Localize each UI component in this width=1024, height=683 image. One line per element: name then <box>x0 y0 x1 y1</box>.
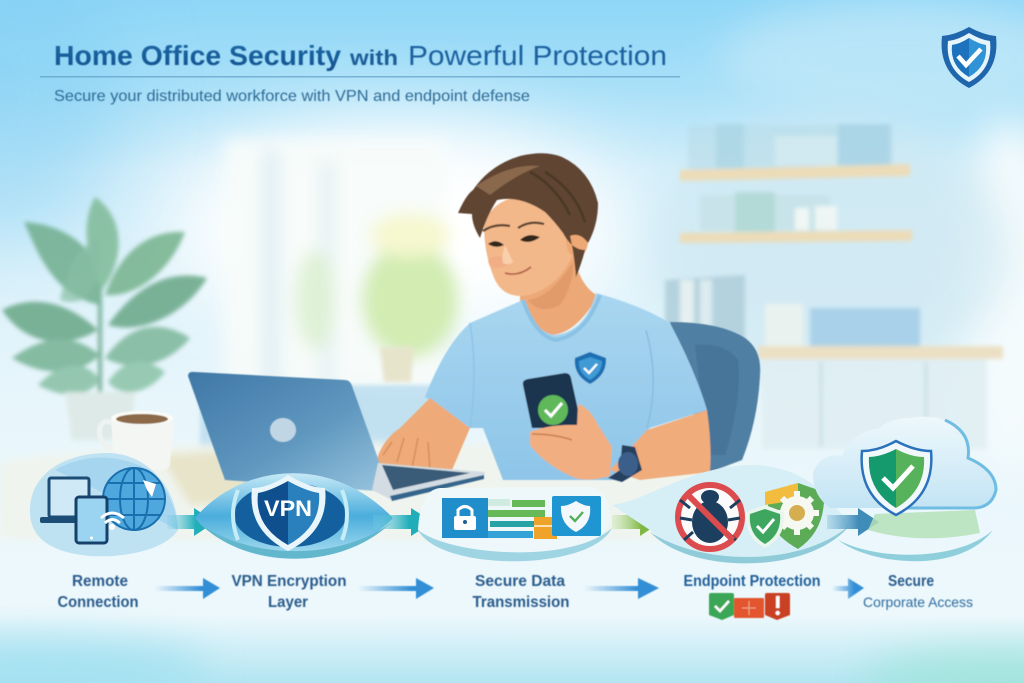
title: Home Office Security <box>54 40 341 71</box>
t-shirt <box>425 293 707 480</box>
label: VPN Encryption Layer: VPN Encryption <box>232 573 346 590</box>
laptop <box>188 372 485 501</box>
person working at the laptop <box>376 153 760 482</box>
arrow: VPN to data <box>373 508 433 536</box>
head <box>484 195 578 296</box>
icon: shield check tile <box>552 496 601 536</box>
left arm and typing hand <box>376 398 470 474</box>
step labels row <box>58 573 973 620</box>
icon: laptop <box>40 478 89 523</box>
arrow: label 4 to 5 <box>832 578 864 599</box>
right arm <box>610 410 711 480</box>
potted plant on the left <box>2 197 207 440</box>
icon: small green shield <box>746 505 784 548</box>
eyes and brows <box>488 241 504 247</box>
icon: cloud <box>813 417 996 508</box>
ear <box>566 225 588 257</box>
arrow: label 2 to 3 <box>358 578 434 599</box>
subtitle: Secure your distributed workforce with VPN and endpoint defense <box>54 88 530 105</box>
process flow panels <box>30 417 996 563</box>
title: with <box>349 47 398 70</box>
label: Secure Data Transmission: Secure Data <box>475 573 565 590</box>
label: Secure Corporate Access: Secure <box>888 573 934 590</box>
phone <box>523 373 582 428</box>
neck <box>520 250 598 335</box>
label: Endpoint Protection: Endpoint Protection <box>684 573 820 590</box>
desk surface <box>0 442 760 540</box>
icon: prohibited bug <box>678 485 742 549</box>
label: Secure Corporate Access: Corporate Access <box>863 594 973 610</box>
arrow: label 3 to 4 <box>584 578 659 599</box>
panel: secure corporate access cloud <box>813 417 996 561</box>
hair <box>458 153 598 277</box>
arrow: data to endpoint <box>612 508 661 536</box>
label: Secure Corporate Access <box>863 573 973 610</box>
shirt shield badge <box>575 352 606 384</box>
title: Powerful Protection <box>408 40 667 71</box>
window with blurred greenery <box>200 140 458 475</box>
icon: top-right security shield <box>942 27 996 88</box>
label: Remote Connection: Connection <box>58 594 138 611</box>
data stream bars <box>488 499 545 538</box>
label: VPN Encryption Layer: Layer <box>268 594 308 611</box>
icon: large green shield <box>862 441 931 515</box>
orange data stack <box>534 517 557 539</box>
status badges <box>709 593 790 620</box>
label: Remote Connection <box>58 573 138 611</box>
icon: globe <box>103 468 165 530</box>
wristwatch <box>608 445 642 482</box>
arrow: label 1 to 2 <box>155 578 220 599</box>
icon: padlock tile <box>442 498 488 538</box>
icon: tablet with wifi <box>76 497 124 543</box>
icon: gear shield <box>765 483 824 549</box>
label: Remote Connection: Remote <box>72 573 128 590</box>
panel: endpoint protection <box>612 465 850 563</box>
label: Secure Data Transmission <box>472 573 570 611</box>
nose and smile <box>502 245 513 264</box>
panel: remote connection <box>30 453 178 556</box>
icon: VPN shield: VPN <box>264 496 312 521</box>
shelves and books, upper right <box>680 124 912 243</box>
desk, cabinet and binders on the right <box>665 275 1003 449</box>
hand holding phone <box>530 404 612 480</box>
arrow: endpoint to cloud <box>827 508 879 536</box>
label: Secure Data Transmission: Transmission <box>472 594 570 611</box>
panel: VPN encryption layer <box>195 473 393 559</box>
title <box>54 40 667 71</box>
arrow: remote to VPN <box>167 508 215 536</box>
label: VPN Encryption Layer <box>232 573 346 611</box>
icon: VPN shield <box>251 475 326 551</box>
coffee cup <box>99 411 174 470</box>
office chair <box>670 322 760 472</box>
panel: secure data transmission <box>418 487 612 562</box>
